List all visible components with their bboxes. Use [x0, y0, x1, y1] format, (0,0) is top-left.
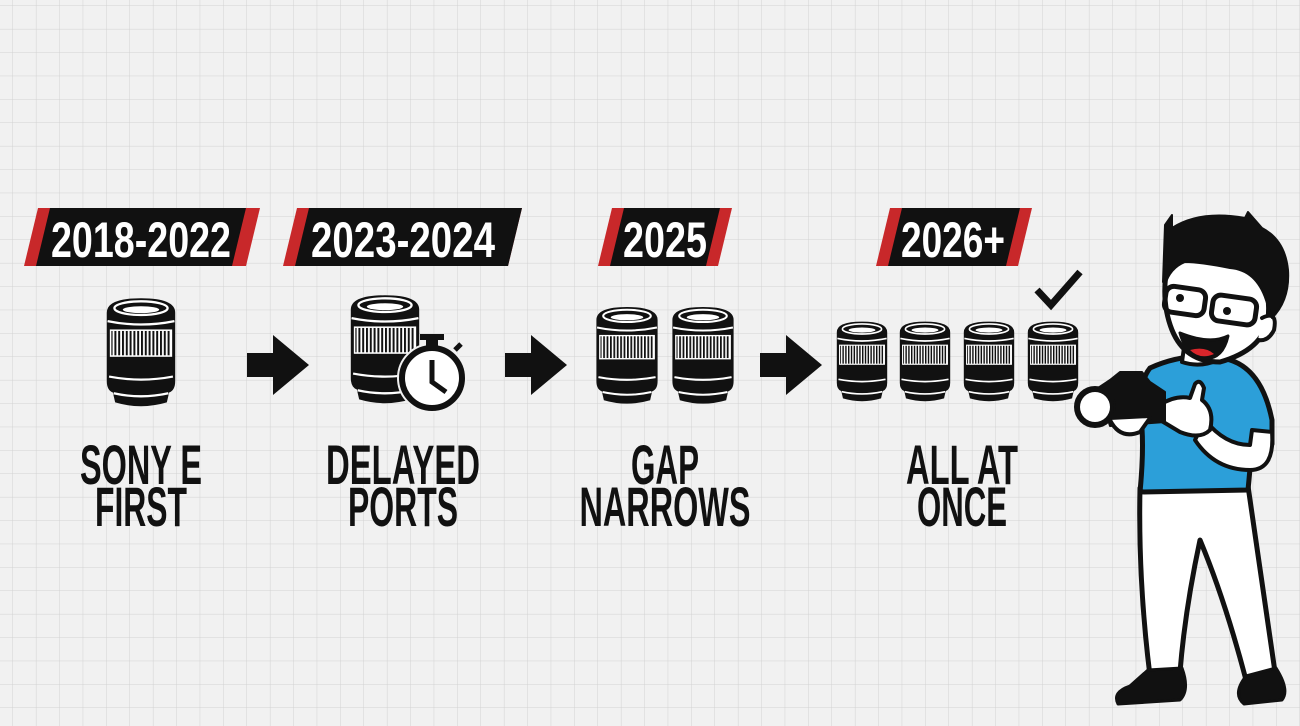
- label: 2023-2024: 2023-2024: [311, 212, 495, 268]
- arrow 2: [505, 335, 567, 395]
- caption: DELAYED PORTS: DELAYED: [326, 433, 480, 496]
- caption: SONY E FIRST: FIRST: [95, 475, 187, 538]
- hand pointing: [1160, 382, 1211, 436]
- icon: lens with stopwatch: [351, 295, 465, 411]
- icon: two lenses: [596, 307, 734, 404]
- pants: [1140, 486, 1275, 680]
- caption: DELAYED PORTS: [326, 433, 480, 538]
- caption: SONY E FIRST: SONY E: [80, 433, 202, 496]
- shoes: [1116, 668, 1186, 704]
- icon: checkmark: [1037, 272, 1080, 305]
- caption: DELAYED PORTS: PORTS: [348, 475, 458, 538]
- caption: GAP NARROWS: [580, 433, 750, 538]
- caption: ALL AT ONCE: ONCE: [917, 475, 1007, 538]
- caption: GAP NARROWS: NARROWS: [580, 475, 750, 538]
- shirt: [1140, 356, 1272, 492]
- left hand: [1110, 418, 1150, 434]
- icon: single lens: [107, 298, 175, 406]
- face: [1165, 250, 1269, 362]
- character: photographer: [1075, 212, 1288, 704]
- camera: [1098, 372, 1165, 426]
- ear: [1258, 316, 1275, 340]
- neck: [1182, 340, 1220, 365]
- caption: SONY E FIRST: [80, 433, 202, 538]
- label: 2026+: 2026+: [901, 212, 1005, 268]
- icon: four lenses: [837, 322, 1078, 401]
- mouth: [1180, 333, 1228, 359]
- glasses: [1163, 285, 1207, 317]
- caption: GAP NARROWS: GAP: [631, 433, 699, 496]
- arrow 3: [760, 335, 822, 395]
- right arm: [1195, 420, 1272, 470]
- hair: [1163, 212, 1288, 318]
- caption: ALL AT ONCE: [906, 433, 1018, 538]
- label: 2018-2022: 2018-2022: [51, 212, 231, 268]
- caption: ALL AT ONCE: ALL AT: [906, 433, 1018, 496]
- label: 2025: 2025: [623, 212, 707, 268]
- arrow 1: [247, 335, 309, 395]
